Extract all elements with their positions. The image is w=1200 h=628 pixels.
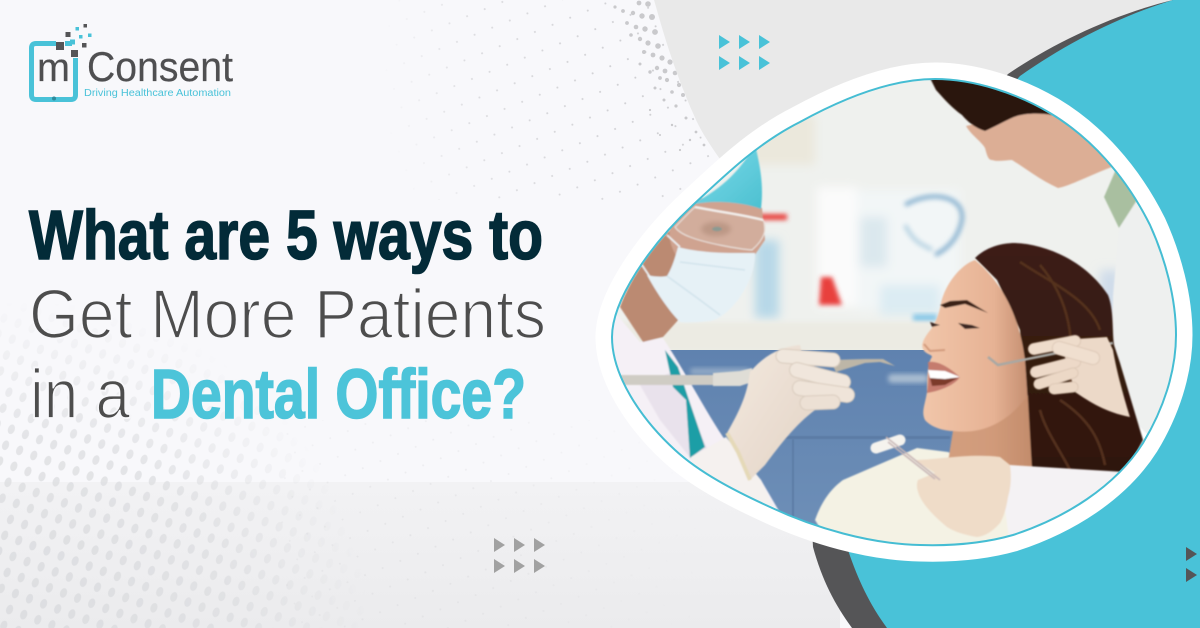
triangles: teal top group bbox=[719, 35, 770, 70]
dark arc behind teal shape bbox=[800, 0, 1200, 628]
doctor: face mask bbox=[647, 247, 755, 322]
cotton roll bbox=[876, 440, 900, 448]
patient: hair bbox=[975, 243, 1143, 478]
patient: mouth interior bbox=[930, 378, 958, 386]
triangles: dark right group bbox=[1186, 547, 1197, 582]
logo icon: pixel squares bbox=[56, 24, 92, 57]
patient: eyes bbox=[930, 322, 980, 329]
photo: blue cabinets bbox=[670, 350, 954, 526]
title bbox=[29, 196, 546, 433]
doctor: head bbox=[669, 198, 765, 262]
photo: nurse bbox=[930, 80, 1173, 434]
goggles: eye bbox=[712, 227, 722, 231]
title line 3 bbox=[30, 355, 526, 433]
background: grey upper right panel bbox=[654, 0, 1200, 200]
title line 1: What are 5 ways to bbox=[29, 196, 543, 274]
patient: bib bbox=[815, 448, 1020, 560]
photo: blurred blue strip bbox=[913, 314, 937, 322]
doctor: coat shadow bbox=[641, 374, 706, 456]
doctor: scaler tube bbox=[620, 375, 715, 385]
dot wave: lower middle small dots bbox=[334, 424, 509, 612]
doctor: coat bbox=[613, 318, 780, 510]
teal background shape bbox=[820, 0, 1200, 628]
title line 2: Get More Patients bbox=[29, 275, 546, 353]
logo icon: tablet bbox=[32, 44, 76, 100]
patient: nose shadow bbox=[924, 344, 945, 351]
doctor: mask straps bbox=[642, 235, 680, 277]
doctor: goggles bbox=[675, 207, 765, 250]
nurse: glove fingers bbox=[1034, 341, 1093, 389]
patient: face and neck bbox=[922, 260, 1032, 470]
doctor: scaler tip bbox=[830, 359, 895, 372]
triangles: grey bottom group bbox=[494, 538, 545, 573]
dot wave: upper right small dots bbox=[411, 0, 710, 200]
patient: eyebrow bbox=[940, 300, 988, 313]
goggles: top highlight bbox=[695, 207, 763, 220]
doctor: neck bbox=[620, 230, 678, 343]
title line 3: Dental Office: Dental Office? bbox=[151, 355, 526, 433]
photo: dental team with patient bbox=[613, 80, 1175, 544]
logo wordmark: Consent: Consent bbox=[87, 43, 233, 90]
nurse: neck and face bbox=[966, 105, 1117, 188]
logo icon: home button bbox=[52, 96, 56, 100]
doctor: glove fingers bbox=[783, 356, 847, 403]
title line 3: in a: in a bbox=[30, 355, 130, 433]
nurse: upper gloved hand bbox=[1034, 337, 1130, 417]
nurse: green collar bbox=[1104, 171, 1136, 228]
nurse: lower sleeve bbox=[1000, 465, 1125, 545]
patient: lips bbox=[927, 362, 960, 393]
dot wave: lower left bbox=[0, 356, 282, 628]
photo: blurred shelves and products bbox=[745, 115, 1120, 318]
nurse: back of glove bbox=[1060, 337, 1130, 417]
photo: doctor bbox=[613, 150, 894, 510]
logo: mConsent bbox=[32, 24, 233, 100]
photo: cabinet handles and seams bbox=[690, 368, 950, 529]
doctor: gloved hand bbox=[727, 345, 847, 480]
tweezers bbox=[886, 437, 940, 480]
photo: counter top bbox=[626, 319, 936, 350]
dot wave: upper right large dots bbox=[613, 1, 705, 151]
doctor: glove cuff bbox=[727, 433, 750, 480]
logo tagline: Driving Healthcare Automation bbox=[84, 88, 231, 99]
patient: teeth bbox=[928, 370, 960, 379]
doctor: teal scrub bbox=[665, 350, 705, 458]
photo: nurse hands and instruments bbox=[876, 337, 1130, 545]
photo frame: white blob border bbox=[612, 79, 1176, 545]
doctor: surgical cap bbox=[695, 150, 763, 210]
nurse: lower gloved hand bbox=[915, 456, 1011, 537]
doctor: mask folds bbox=[667, 262, 745, 315]
doctor: sleeve bbox=[690, 436, 760, 479]
nurse: hair bbox=[930, 78, 1053, 131]
doctor: back of glove bbox=[727, 345, 815, 480]
photo: clinic wall bbox=[617, 80, 1119, 322]
doctor: scaler joint bbox=[713, 368, 752, 386]
goggles: lens bbox=[675, 207, 765, 250]
patient: neck shadow bbox=[948, 395, 1032, 470]
photo: patient bbox=[815, 243, 1143, 560]
photo frame: teal outline bbox=[612, 79, 1176, 545]
nurse: coat bbox=[1113, 197, 1190, 460]
logo wordmark: m: m bbox=[37, 46, 70, 90]
goggles: eye socket shading bbox=[701, 222, 731, 236]
patient: hair strands bbox=[1020, 262, 1105, 470]
nurse: probe bbox=[988, 343, 1113, 365]
photo: blurred red accents bbox=[747, 214, 842, 305]
photo: blurred logo on box bbox=[905, 197, 962, 255]
background: lower grey band bbox=[0, 482, 840, 628]
